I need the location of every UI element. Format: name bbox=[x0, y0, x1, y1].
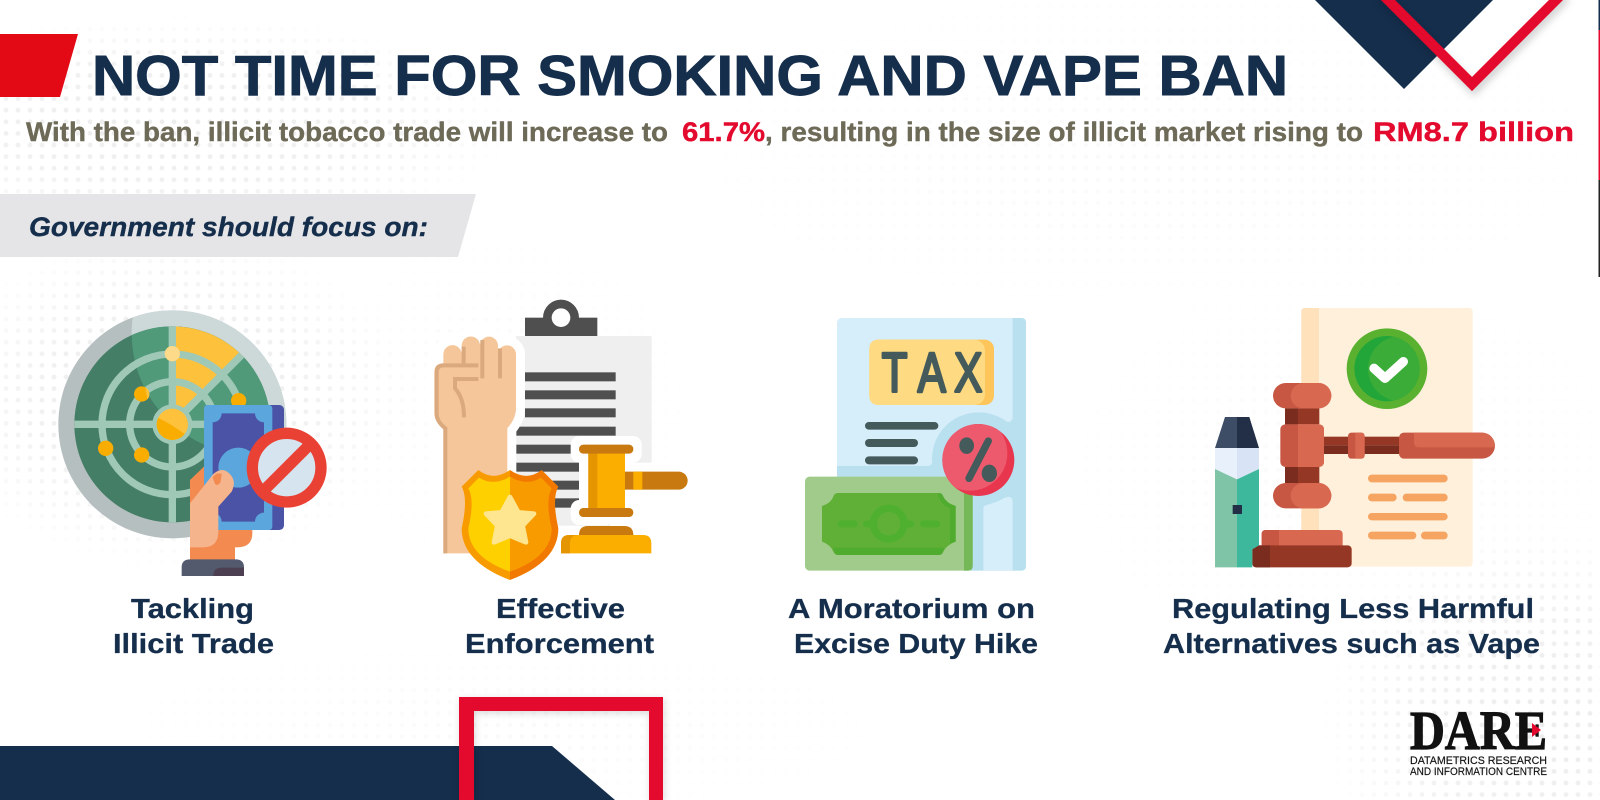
caption: moratorium on excise duty hike: Excise Duty Hike bbox=[794, 628, 1038, 659]
top-right red chevron bbox=[1380, 0, 1564, 84]
subtitle: With the ban, illicit tobacco trade will increase to bbox=[26, 117, 668, 147]
caption: regulating less harmful alternatives: Alternatives such as Vape bbox=[1163, 628, 1540, 659]
icon: tax document with money and percent: TAX bbox=[882, 342, 982, 404]
caption: tackling illicit trade: Illicit Trade bbox=[113, 628, 274, 659]
caption: moratorium on excise duty hike: A Moratorium on bbox=[788, 593, 1035, 624]
caption: moratorium on excise duty hike bbox=[788, 593, 1038, 659]
title: NOT TIME FOR SMOKING AND VAPE BAN bbox=[92, 44, 1288, 108]
focus heading banner bbox=[0, 194, 476, 257]
bottom navy band bbox=[0, 746, 615, 800]
caption: effective enforcement bbox=[465, 593, 654, 659]
subtitle: 61.7% bbox=[682, 117, 765, 147]
focus heading banner: Government should focus on: bbox=[29, 212, 428, 242]
logo: DARE: AND INFORMATION CENTRE bbox=[1410, 766, 1547, 778]
red title tab bbox=[0, 34, 78, 97]
right edge line bbox=[1598, 0, 1600, 277]
subtitle: RM8.7 billion bbox=[1373, 117, 1574, 147]
caption: effective enforcement: Effective bbox=[496, 593, 625, 624]
caption: tackling illicit trade bbox=[113, 593, 274, 659]
caption: effective enforcement: Enforcement bbox=[465, 628, 654, 659]
top-right navy triangle bbox=[1315, 0, 1493, 89]
icon: law document, gavel and vape bbox=[1215, 308, 1495, 567]
caption: regulating less harmful alternatives: Regulating Less Harmful bbox=[1172, 593, 1534, 624]
subtitle: , resulting in the size of illicit market rising to bbox=[765, 117, 1363, 147]
logo: DARE: DATAMETRICS RESEARCH bbox=[1410, 755, 1547, 767]
bottom red frame bbox=[459, 697, 663, 800]
icon: enforcement fist, clipboard, badge and gavel bbox=[430, 300, 688, 580]
subtitle bbox=[26, 117, 1574, 147]
caption: tackling illicit trade: Tackling bbox=[131, 593, 254, 624]
icon: radar with banned money bbox=[58, 310, 327, 576]
caption: regulating less harmful alternatives bbox=[1163, 593, 1540, 659]
logo: DARE: DARE bbox=[1410, 700, 1547, 761]
icon: tax document with money and percent bbox=[805, 318, 1026, 571]
